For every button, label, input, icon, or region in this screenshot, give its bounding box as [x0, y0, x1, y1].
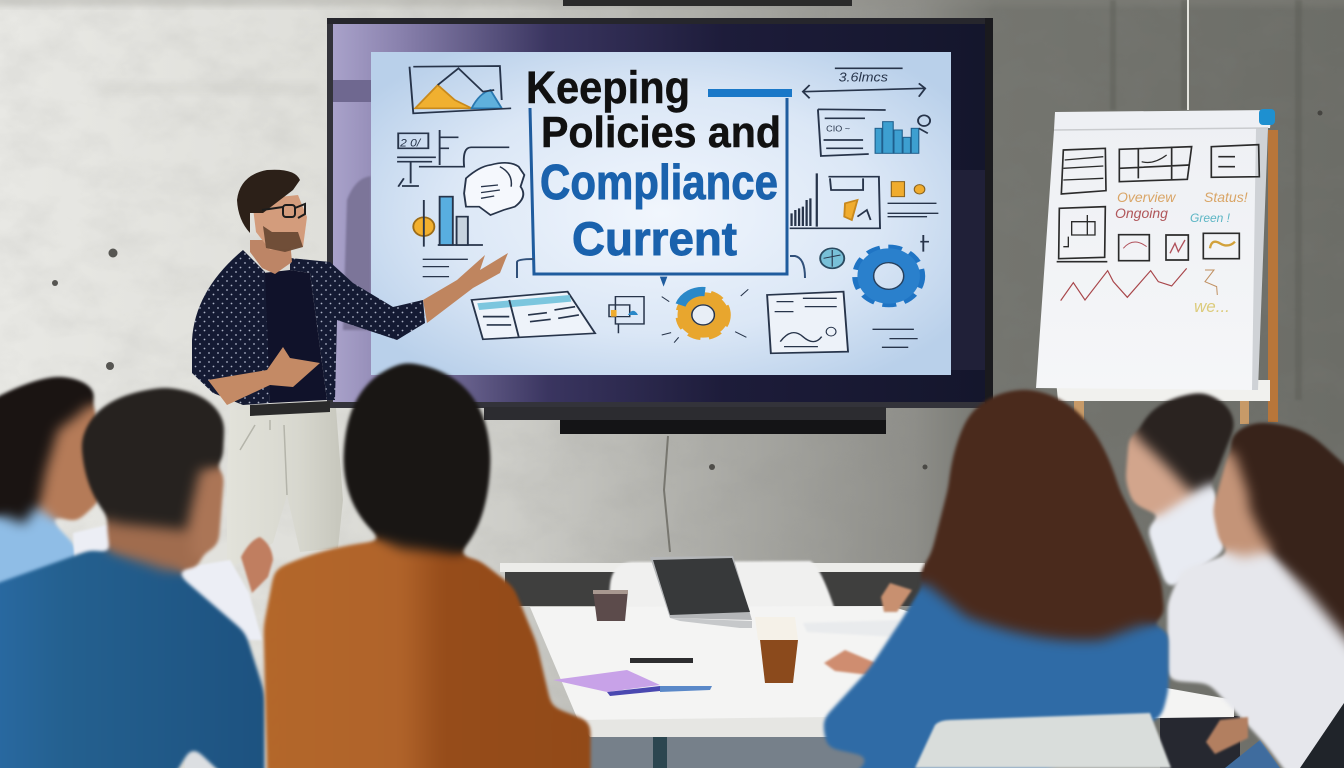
- beard: [263, 226, 303, 252]
- sketch: blue gear: [856, 248, 922, 304]
- ceiling fixture: [563, 0, 852, 6]
- wall-mounted display: [327, 18, 993, 434]
- blue clip: [1259, 109, 1275, 125]
- left forearm and hand: [208, 347, 320, 405]
- purple notebook: [553, 670, 712, 696]
- slide sketches: [397, 66, 938, 353]
- backing board: [1056, 380, 1270, 401]
- audience member far left: [0, 377, 100, 600]
- inner t-shirt: [263, 270, 327, 403]
- sketch: arrow label: 3.6lmcs: [839, 70, 888, 84]
- hair: [237, 170, 300, 233]
- sketch: document with graph: [767, 292, 848, 353]
- sketch: small chart tag: [609, 297, 644, 333]
- sketch: middle right chart: [790, 173, 938, 228]
- sketch: small dial: [820, 235, 929, 347]
- floor and table legs: [185, 716, 1280, 768]
- right forearm and hand: [423, 253, 508, 323]
- shirt left side and sleeve: [192, 250, 270, 405]
- flip chart handwriting: Ongoing: [1115, 205, 1168, 221]
- sketch: left note: [397, 130, 509, 187]
- audience man in blue shirt: [0, 388, 264, 768]
- shirt right side and sleeve: [290, 258, 425, 400]
- sketch: report and bars: CIO ~: [826, 124, 850, 134]
- flip chart handwriting: Green !: [1190, 211, 1231, 225]
- flip chart handwriting: Overview: [1117, 189, 1176, 205]
- flip chart handwriting: we...: [1194, 297, 1230, 316]
- face: [252, 195, 307, 250]
- neck: [250, 240, 292, 274]
- white chair in foreground: [915, 713, 1171, 768]
- flip chart sketches: [1057, 145, 1259, 301]
- glass of coffee: [755, 617, 798, 683]
- wall trim and dark panel: [500, 563, 925, 606]
- sketch: orange gear: [662, 289, 748, 343]
- slide title: Compliance: [540, 156, 778, 210]
- hand near laptop: [881, 583, 912, 612]
- sketch: report and bars: [818, 109, 930, 156]
- sketch: open book: [472, 292, 595, 339]
- flip chart handwriting: Status!: [1204, 189, 1248, 205]
- raised hand: [241, 537, 273, 593]
- audience woman in orange sweater: [264, 363, 590, 768]
- slide title: Policies and: [541, 108, 781, 157]
- audience woman in denim jacket: [823, 390, 1168, 768]
- white chair behind table: [608, 561, 835, 610]
- sketch: arrow label: [803, 68, 925, 98]
- belt: [250, 401, 330, 416]
- conference table: [530, 606, 1234, 737]
- sketch: area chart: [410, 66, 511, 113]
- sketch: coin and bars: [413, 197, 483, 277]
- hand on table right: [824, 650, 876, 675]
- audience woman at far right: [1168, 423, 1344, 768]
- audience member in white shirt: [73, 522, 262, 640]
- slide title: Keeping: [526, 62, 690, 113]
- hand lower right: [1206, 717, 1248, 754]
- coffee cup: [593, 590, 628, 621]
- laptop: [650, 556, 752, 628]
- trousers: [227, 408, 343, 570]
- slide title: Current: [572, 212, 737, 265]
- audience man at right: [1126, 393, 1234, 590]
- slide title frame: [517, 89, 805, 278]
- dark chair lower right: [1300, 703, 1344, 768]
- sketch: left note: 2 0/: [399, 138, 422, 149]
- glasses: [262, 204, 305, 218]
- flip chart: [1036, 109, 1278, 424]
- slide: [371, 52, 951, 375]
- easel legs: [1074, 130, 1278, 424]
- pen: [630, 658, 693, 663]
- presenter: [192, 170, 508, 570]
- sketch: speech cloud: [464, 163, 524, 215]
- flip chart handwriting: [1115, 189, 1248, 316]
- screen mount and soundbar: [484, 407, 886, 434]
- slide title: [526, 62, 781, 265]
- papers on table: [803, 620, 900, 637]
